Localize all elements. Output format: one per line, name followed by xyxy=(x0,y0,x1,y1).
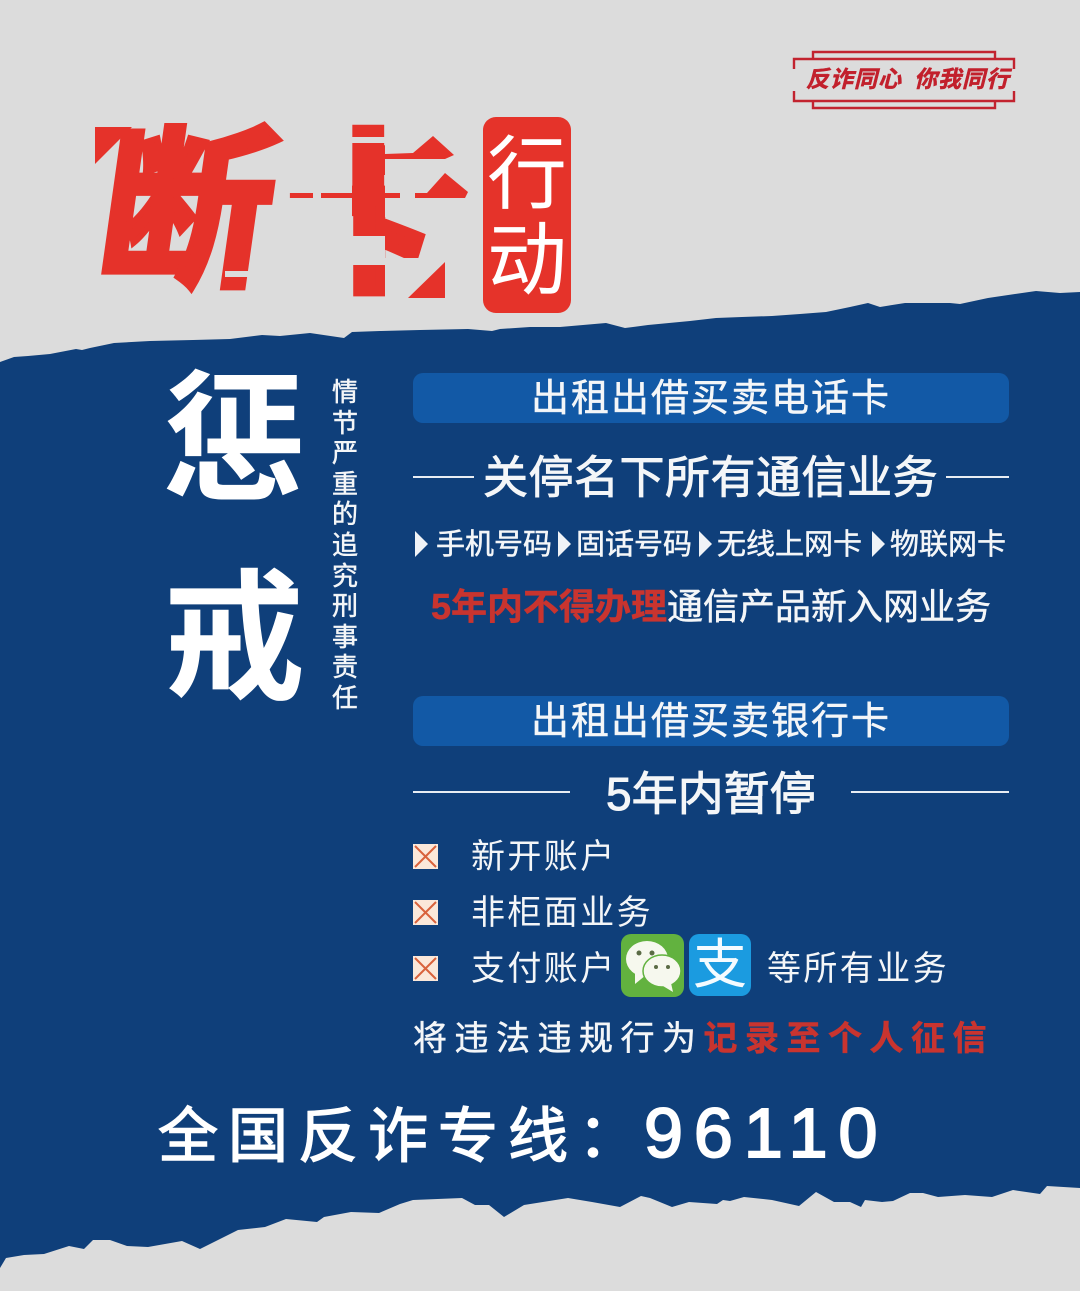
arrow xyxy=(415,531,428,557)
band: phone card xyxy=(413,373,1009,423)
icon: WeChat xyxy=(621,934,684,997)
heading text: 5年内暂停 xyxy=(606,768,816,820)
checkbox xyxy=(413,956,438,981)
checkbox xyxy=(413,900,438,925)
checkbox xyxy=(413,844,438,869)
Alipay mark: 支 xyxy=(693,935,747,995)
decorative triangle xyxy=(95,127,132,164)
heading text: 关停名下所有通信业务 xyxy=(483,452,938,503)
band text: 出租出借买卖电话卡 xyxy=(531,378,891,420)
item: payment accounts: 支付账户 xyxy=(471,950,617,988)
heading: 戒: 戒 xyxy=(163,560,305,719)
item 无线上网卡: 无线上网卡 xyxy=(717,529,862,561)
decorative tip upper right xyxy=(385,136,454,159)
icon: Alipay xyxy=(689,934,751,996)
arrow xyxy=(872,531,885,557)
band: bank card xyxy=(413,696,1009,746)
item 固话号码: 固话号码 xyxy=(576,529,692,561)
list: affected numbers xyxy=(415,529,1006,561)
item 物联网卡: 物联网卡 xyxy=(890,529,1006,561)
item 手机号码: 手机号码 xyxy=(436,529,552,561)
badge text 动: 动 xyxy=(487,216,567,305)
badge text 行: 行 xyxy=(487,130,567,219)
item: non-counter services: 非柜面业务 xyxy=(471,894,653,932)
vertical text: 情节严重的追究刑事责任 xyxy=(332,377,358,713)
heading: 惩: 惩 xyxy=(163,361,305,520)
decorative triangle lower right xyxy=(408,262,445,298)
slogan text: 反诈同心 你我同行 xyxy=(806,66,1010,92)
badge: 行动 xyxy=(483,117,571,313)
decorative tip right xyxy=(415,173,468,198)
badge: anti-fraud slogan xyxy=(792,50,1016,110)
text: 5-year ban on new telecom services: 5年内不得办理通信产品新入网业务 xyxy=(431,586,991,627)
hotline: 全国反诈专线：96110 xyxy=(158,1094,888,1172)
title character 断: 断 xyxy=(86,73,293,322)
title character 卡: 卡 xyxy=(287,76,459,326)
text: all services: 等所有业务 xyxy=(767,950,949,988)
item: new accounts: 新开账户 xyxy=(471,838,617,876)
text: credit record notice: 将违法违规行为记录至个人征信 xyxy=(413,1020,994,1058)
band text: 出租出借买卖银行卡 xyxy=(531,701,891,743)
cuts through the title characters xyxy=(225,137,471,306)
title: 断卡 xyxy=(86,73,468,326)
arrow xyxy=(558,531,571,557)
arrow xyxy=(699,531,712,557)
